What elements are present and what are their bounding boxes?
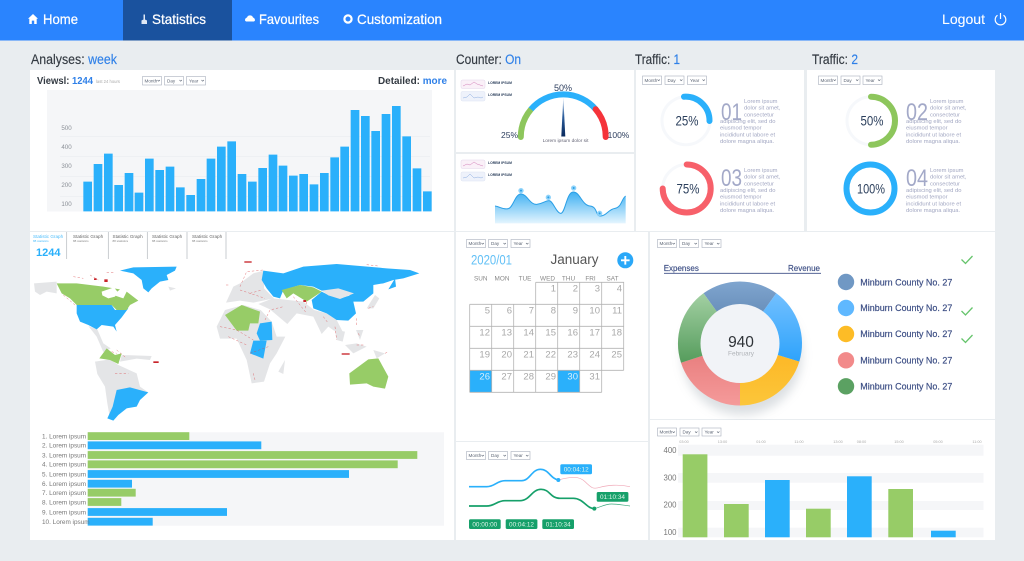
- ring: 100%: 100%: [857, 180, 885, 196]
- text block 03: dolore magna aliqua.: [720, 208, 775, 214]
- chart bars: [83, 106, 432, 211]
- heading: Traffic 1: Traffic: 1: [635, 52, 680, 67]
- date selectors: Day: [491, 453, 500, 458]
- date selectors: [466, 240, 530, 248]
- revenue label: Revenue: [788, 264, 821, 273]
- text block 02: incididunt ut labore et: [906, 132, 961, 138]
- bottom time tags: 00:04:12: [509, 521, 534, 528]
- text block 02: dolore magna aliqua.: [906, 139, 961, 145]
- nav item: Favourites: Favourites: [259, 11, 319, 27]
- time axis: 13:00: [833, 440, 843, 444]
- heading: Traffic 2: Traffic: 2: [812, 52, 858, 67]
- text block 04: Lorem ipsum: [930, 168, 964, 174]
- add button: [617, 252, 633, 268]
- time axis: 11:00: [794, 440, 804, 444]
- time axis: 03:00: [679, 440, 689, 444]
- statistic tabs: Statistic Graph: [73, 234, 104, 239]
- panel: gauge counter: [456, 70, 634, 152]
- donut center value: 940: [728, 334, 754, 351]
- text block 01: dolor sit amet,: [744, 106, 781, 112]
- weekday labels: FRI: [585, 276, 596, 282]
- ring: 50%: [847, 97, 895, 145]
- ranking labels: 4. Lorem ipsum: [42, 462, 86, 469]
- ranking labels: 1. Lorem ipsum: [42, 433, 86, 440]
- legend: Minburn County No. 27: [860, 356, 952, 366]
- text block 03: [720, 165, 781, 214]
- date selectors: Day: [682, 241, 691, 246]
- calendar dates: 13: [501, 328, 512, 338]
- ranking labels: 8. Lorem ipsum: [42, 499, 86, 506]
- ranking labels: 10. Lorem ipsum: [42, 519, 90, 526]
- text block 03: 03: [721, 165, 742, 192]
- panel: world map and ranking: [30, 232, 454, 540]
- text block 04: [906, 165, 967, 214]
- chart y axis: 300: [61, 163, 72, 170]
- time axis: 05:00: [933, 440, 943, 444]
- ring: 25%: [662, 97, 710, 145]
- detailed link: Detailed: more: [378, 75, 447, 87]
- calendar dates: 27: [501, 372, 512, 382]
- calendar dates: 22: [545, 350, 556, 360]
- statistic tabs: Statistic Graph: [192, 234, 223, 239]
- text block 01: eiusmod tempor: [720, 126, 762, 132]
- calendar dates: 16: [567, 328, 578, 338]
- ranking labels: 2. Lorem ipsum: [42, 443, 86, 450]
- chart y axis: 500: [61, 125, 72, 132]
- calendar grid: [470, 282, 624, 392]
- date selectors: Year: [189, 78, 199, 84]
- date selectors: Day: [491, 241, 500, 246]
- mini legend: [461, 160, 512, 181]
- weekday labels: THU: [562, 276, 575, 282]
- navigation bar: [0, 0, 1024, 40]
- time axis: 13:00: [718, 440, 727, 444]
- date selectors: Day: [682, 430, 691, 435]
- time tag green: [597, 492, 628, 502]
- calendar dates: 25: [611, 350, 622, 360]
- bottom time tags: 00:00:00: [472, 521, 498, 528]
- ring: 100%: [846, 164, 894, 212]
- text block 03: adipiscing elit, sed do: [720, 188, 775, 194]
- y axis: 300: [663, 474, 677, 482]
- panel: bottom bar chart: [650, 420, 995, 540]
- time axis: 11:00: [972, 440, 982, 444]
- text block 03: consectetur: [744, 181, 774, 187]
- gauge labels: Lorem ipsum dolor sit: [543, 138, 589, 144]
- calendar dates: 20: [501, 350, 512, 360]
- date selectors: [466, 452, 530, 460]
- date selectors: [642, 76, 706, 84]
- calendar dates: 26: [479, 372, 490, 382]
- date selectors: Day: [668, 78, 676, 83]
- panel: traffic 1: [636, 70, 804, 231]
- y axis: 100: [663, 528, 677, 537]
- date selectors: Day: [844, 78, 852, 83]
- calendar dates: 10: [589, 306, 600, 316]
- nav item: Statistics: Statistics: [152, 11, 206, 27]
- chart bands: [678, 445, 984, 537]
- text block 01: [720, 99, 781, 145]
- chart background: [47, 90, 432, 212]
- calendar dates: 23: [567, 350, 578, 360]
- calendar dates: 21: [523, 350, 534, 360]
- date selectors: [142, 76, 206, 85]
- date selectors: Year: [514, 241, 523, 246]
- calendar year and month: 2020/01: [471, 252, 512, 268]
- date selectors: Year: [704, 241, 714, 246]
- calendar dates: 2: [573, 284, 578, 294]
- statistic tabs: Statistic Graph: [33, 234, 64, 239]
- ranking labels: 9. Lorem ipsum: [42, 509, 86, 516]
- heading: Counter: Counter: On: [456, 52, 521, 67]
- text block 02: adipiscing elit, sed do: [906, 119, 961, 125]
- calendar dates: 1: [551, 284, 556, 294]
- text block 04: 04: [906, 165, 928, 192]
- chart y axis: 200: [61, 182, 72, 189]
- statistic tabs: 88 statistics: [152, 239, 168, 243]
- date selectors: Month: [468, 453, 482, 458]
- calendar dates: [479, 284, 622, 382]
- text block 01: consectetur: [744, 112, 774, 118]
- panel: traffic 2: [807, 70, 995, 231]
- weekday labels: SUN: [474, 276, 488, 282]
- donut: [678, 281, 802, 415]
- text block 01: 01: [721, 99, 742, 126]
- legend: Minburn County No. 27: [860, 329, 952, 340]
- panel: donut chart: [650, 232, 995, 419]
- text block 01: dolore magna aliqua.: [720, 139, 775, 145]
- statistic tabs: Statistic Graph: [112, 234, 143, 239]
- mini legend: [461, 80, 512, 101]
- calendar dates: 15: [545, 328, 556, 338]
- calendar dates: 29: [545, 372, 556, 382]
- calendar dates: 31: [589, 372, 600, 382]
- y axis: 200: [663, 500, 677, 510]
- active tab: Statistics: [123, 0, 232, 40]
- text block 01: Lorem ipsum: [744, 99, 778, 105]
- heading: Analyses: Analyses: week: [31, 52, 117, 67]
- date selectors: Month: [660, 430, 673, 435]
- mini legend: LOREM IPSUM: [488, 173, 512, 177]
- y axis: [663, 446, 677, 537]
- calendar dates: 18: [611, 328, 622, 338]
- text block 04: dolore magna aliqua.: [906, 208, 961, 214]
- text block 03: incididunt ut labore et: [720, 201, 775, 207]
- views count: Viewsl: 1244: [37, 76, 93, 87]
- green bars: [683, 454, 913, 537]
- ranking labels: 6. Lorem ipsum: [42, 481, 86, 488]
- calendar dates: 12: [479, 328, 490, 338]
- text block 02: consectetur: [930, 112, 960, 118]
- text block 02: Lorem ipsum: [930, 99, 964, 105]
- statistic tabs: Statistic Graph: [152, 234, 183, 239]
- calendar dates: 30: [567, 372, 578, 382]
- statistic tabs: 88 statistics: [33, 239, 49, 243]
- calendar dates: 14: [523, 328, 534, 338]
- calendar dates: 19: [479, 350, 490, 360]
- text block 01: adipiscing elit, sed do: [720, 119, 775, 125]
- nav item: Logout: [942, 11, 1006, 27]
- mini legend: LOREM IPSUM: [488, 161, 512, 165]
- mini legend: LOREM IPSUM: [488, 81, 512, 85]
- calendar dates: 17: [589, 328, 600, 338]
- text block 02: dolor sit amet,: [930, 106, 967, 112]
- time tag blue: 00:04:12: [564, 466, 589, 474]
- time axis: 15:00: [894, 440, 904, 444]
- ring: 25%: 25%: [676, 112, 698, 128]
- date selectors: Month: [644, 78, 658, 83]
- ring: 50%: 50%: [860, 112, 884, 128]
- bottom time tags: [469, 519, 574, 529]
- calendar dates: 9: [573, 306, 578, 316]
- ranking labels: 5. Lorem ipsum: [42, 471, 86, 478]
- text block 04: consectetur: [930, 181, 960, 187]
- legend: Minburn County No. 27: [860, 382, 952, 392]
- weekday labels: [474, 276, 619, 282]
- gauge labels: 100%: [608, 130, 630, 140]
- statistic tabs: [33, 232, 226, 259]
- date selectors: Year: [866, 78, 875, 83]
- calendar dates: 24: [589, 350, 600, 360]
- legend: Minburn County No. 27: [860, 303, 952, 314]
- calendar dates: 28: [523, 372, 534, 382]
- calendar month name: January: [550, 252, 599, 267]
- text block 03: dolor sit amet,: [744, 175, 781, 181]
- nav item: Customization: Customization: [357, 11, 442, 27]
- date selectors: Month: [660, 241, 673, 246]
- time tag green: 01:10:34: [600, 494, 625, 501]
- timeline curves: [469, 469, 630, 511]
- ring: 75%: 75%: [676, 180, 700, 196]
- calendar dates: 6: [507, 306, 512, 316]
- expenses label: Expenses: [664, 264, 699, 273]
- ring: 75%: [663, 164, 711, 212]
- weekday labels: TUE: [519, 276, 531, 282]
- date selectors: Month: [144, 78, 158, 84]
- text block 03: Lorem ipsum: [744, 168, 778, 174]
- area curve: [495, 185, 626, 223]
- date selectors: Month: [820, 78, 834, 83]
- gauge arc: [521, 94, 606, 137]
- date selectors: Year: [704, 430, 714, 435]
- check marks: [962, 256, 972, 342]
- date selectors: Day: [167, 78, 176, 84]
- text block 01: incididunt ut labore et: [720, 132, 775, 138]
- ranking labels: 3. Lorem ipsum: [42, 452, 86, 459]
- weekday labels: SAT: [607, 276, 619, 282]
- time tag blue: [560, 464, 592, 474]
- ranking bars: [42, 432, 444, 526]
- gauge labels: [501, 83, 630, 144]
- statistic tabs: 88 statistics: [192, 239, 208, 243]
- y axis: 400: [663, 446, 677, 455]
- calendar dates: 4: [617, 284, 622, 294]
- nav item: Home: Home: [43, 11, 78, 27]
- legend: [838, 274, 952, 394]
- donut center caption: February: [728, 350, 755, 358]
- weekday labels: WED: [540, 276, 555, 282]
- statistic tabs: 88 statistics: [112, 239, 129, 243]
- calendar dates: 11: [612, 306, 622, 316]
- panel: timeline: [456, 442, 648, 540]
- weekday labels: MON: [495, 276, 510, 282]
- calendar dates: 3: [595, 284, 600, 294]
- statistic tabs: 1244: [36, 247, 61, 259]
- nav item: Home: [28, 11, 78, 27]
- nav item: Logout: Logout: [942, 11, 985, 27]
- views caption: last 24 hours: [96, 79, 120, 84]
- world map: [34, 261, 419, 421]
- panel: area chart: [456, 154, 634, 231]
- gauge needle: [561, 97, 565, 136]
- text block 04: dolor sit amet,: [930, 175, 967, 181]
- gauge labels: 25%: [501, 130, 518, 140]
- time axis: 08:00: [857, 440, 866, 444]
- calendar dates: 5: [485, 306, 490, 316]
- panel: views bar chart: [30, 70, 454, 231]
- text block 04: adipiscing elit, sed do: [906, 188, 961, 194]
- mini legend: LOREM IPSUM: [488, 93, 512, 97]
- bottom time tags: 01:10:34: [546, 521, 571, 528]
- calendar dates: 8: [551, 306, 556, 316]
- text block 04: eiusmod tempor: [906, 195, 948, 201]
- blue bars: [765, 476, 956, 537]
- text block 02: eiusmod tempor: [906, 126, 948, 132]
- text block 03: eiusmod tempor: [720, 195, 762, 201]
- date selectors: [658, 428, 721, 436]
- panel: calendar: [456, 232, 648, 441]
- chart y axis: [61, 125, 72, 208]
- ranking labels: [42, 433, 90, 526]
- text block 02: 02: [906, 99, 928, 126]
- date selectors: [818, 76, 882, 84]
- date selectors: Year: [690, 78, 700, 83]
- time axis: 01:00: [756, 440, 766, 444]
- date selectors: [658, 240, 721, 248]
- ranking labels: 7. Lorem ipsum: [42, 490, 86, 497]
- time axis: [679, 440, 982, 444]
- calendar dates: 7: [529, 306, 534, 316]
- highlighted dates: [470, 370, 580, 392]
- statistic tabs: 88 statistics: [73, 239, 89, 243]
- date selectors: Month: [468, 241, 482, 246]
- text block 02: [906, 99, 967, 145]
- gauge labels: 50%: [554, 83, 572, 93]
- legend: Minburn County No. 27: [860, 278, 952, 288]
- chart y axis: 400: [61, 144, 72, 151]
- text block 04: incididunt ut labore et: [906, 201, 961, 207]
- chart y axis: 100: [61, 201, 72, 208]
- date selectors: Year: [514, 453, 523, 458]
